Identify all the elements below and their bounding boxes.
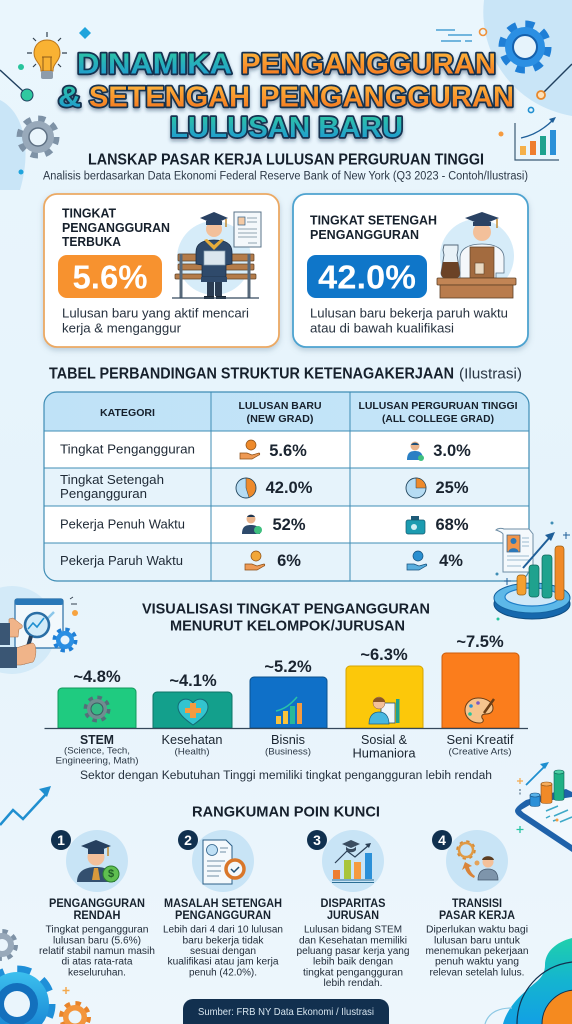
summary heading: RANGKUMAN POIN KUNCI (192, 804, 380, 820)
table header row (100, 400, 518, 425)
icon: graduate with coin (77, 840, 119, 882)
badge: 2 (178, 830, 198, 850)
bar: STEM: ~4.8% (73, 668, 121, 686)
point text: penuh (42.0%). (189, 968, 257, 978)
point text: Diperlukan waktu bagi (426, 924, 528, 936)
badge: 4: 4 (438, 832, 446, 848)
row: pekerja penuh waktu: 52% (272, 516, 306, 534)
row: tingkat setengah pengangguran: 42.0% (266, 479, 313, 497)
bar labels: Kesehatan (162, 732, 222, 747)
point text: sesuai dengan (190, 946, 256, 957)
bar: Sosial: ~6.3% (360, 646, 408, 664)
point text (39, 898, 155, 978)
bar: Kesehatan (153, 672, 232, 728)
subtitle heading: LANSKAP PASAR KERJA LULUSAN PERGURUAN TINGGI (88, 152, 484, 168)
bar labels: (Science, Tech, (64, 746, 130, 756)
row: pekerja penuh waktu: Pekerja Penuh Waktu (60, 518, 185, 532)
icon: small rising bar chart (515, 117, 559, 160)
bar: Sosial (346, 646, 423, 728)
bar labels (56, 732, 514, 766)
card heading: TINGKAT SETENGAH (310, 214, 437, 228)
row: pekerja paruh waktu (60, 551, 463, 570)
bar: Seni Kreatif (442, 633, 519, 728)
icon: bottom-left gears (0, 932, 88, 1024)
key point 2 (163, 830, 283, 978)
title: PENGANGGURAN (241, 48, 496, 80)
badge: 2: 2 (184, 832, 192, 848)
panel: open unemployment card (44, 194, 279, 347)
point text (426, 898, 528, 978)
row: tingkat setengah pengangguran (60, 473, 469, 501)
chart caption: Sektor dengan Kebutuhan Tinggi memiliki tingkat pengangguran lebih rendah (80, 770, 492, 782)
bar: STEM (58, 668, 136, 728)
point text (163, 898, 283, 978)
card description: kerja & menganggur (62, 320, 182, 336)
point text: relevan setelah lulus. (430, 968, 524, 978)
icon: light bulb (27, 32, 67, 79)
title: PENGANGGURAN (260, 82, 514, 114)
bar labels: Sosial & (361, 732, 407, 747)
badge: 4 (432, 830, 452, 850)
table header row: LULUSAN BARU (238, 400, 322, 412)
point text: TRANSISI (452, 898, 502, 910)
bar labels: (Business) (265, 746, 311, 758)
row: tingkat setengah pengangguran: Pengangguran (60, 487, 147, 501)
title: & (58, 82, 81, 114)
bar: Bisnis (250, 658, 327, 728)
row: pekerja penuh waktu: 68% (435, 516, 469, 534)
row: tingkat pengangguran: 3.0% (433, 442, 471, 460)
point text: kualifikasi atau jam kerja (168, 956, 279, 968)
table header row: (ALL COLLEGE GRAD) (382, 413, 494, 425)
stat: 42.0%: 42.0% (318, 258, 416, 296)
chart heading (142, 600, 430, 634)
card description: atau di bawah kualifikasi (310, 320, 454, 336)
card heading: PENGANGGURAN (62, 221, 170, 235)
title: SETENGAH (89, 82, 250, 114)
table heading: TABEL PERBANDINGAN STRUKTUR KETENAGAKERJAAN (49, 366, 454, 382)
bar labels: Engineering, Math) (56, 756, 138, 766)
point text: Lulusan bidang STEM (304, 924, 402, 936)
icon: grey gear (20, 119, 56, 155)
bar labels: Humaniora (352, 746, 416, 760)
bar labels: Bisnis (271, 732, 305, 747)
key point 1 (39, 830, 155, 978)
card heading: TERBUKA (62, 235, 121, 249)
badge: 3: 3 (313, 832, 321, 848)
icon: top decorative marks (0, 27, 572, 174)
bar labels: STEM (80, 732, 114, 747)
point text: Tingkat pengangguran (46, 924, 148, 936)
source footer: Sumber: FRB NY Data Ekonomi / Ilustrasi (198, 1006, 374, 1018)
title: DINAMIKA (77, 48, 232, 80)
icon: phone with bars (515, 762, 572, 852)
chart heading: MENURUT KELOMPOK/JURUSAN (170, 618, 405, 634)
key point 4 (426, 830, 528, 978)
point text: RENDAH (74, 910, 120, 922)
point text (296, 898, 410, 989)
row: tingkat pengangguran: 5.6% (269, 442, 307, 460)
row: pekerja paruh waktu: 6% (277, 552, 301, 570)
bar labels: (Health) (174, 746, 210, 758)
row: tingkat setengah pengangguran: 25% (435, 479, 469, 497)
icon: document and bar chart on platform (494, 522, 570, 620)
illustration: barista graduate (437, 212, 516, 298)
icon: graduate with coin: $ (108, 868, 114, 880)
title: LULUSAN BARU (170, 112, 403, 144)
badge: 1: 1 (57, 832, 65, 848)
icon: browser with magnifier and hands (0, 597, 78, 668)
table header row: (NEW GRAD) (246, 413, 314, 425)
icon: document with badge (203, 840, 244, 884)
stat: 42.0% (307, 255, 427, 298)
card description: Lulusan baru yang aktif mencari (62, 306, 249, 320)
row: tingkat pengangguran (60, 440, 471, 461)
panel: underemployment card (293, 194, 528, 347)
bar labels: Seni Kreatif (446, 732, 514, 747)
card heading (310, 214, 437, 242)
bar: Seni Kreatif: ~7.5% (456, 633, 504, 651)
icon: blue gear (503, 25, 547, 69)
point text: MASALAH SETENGAH (164, 898, 282, 910)
point text: menemukan pekerjaan (426, 946, 528, 957)
card heading (62, 206, 170, 249)
card description (310, 306, 508, 336)
point text: keseluruhan. (68, 968, 126, 978)
point text: Lebih dari 4 dari 10 lulusan (163, 924, 283, 936)
badge: 1 (51, 830, 71, 850)
point text: PENGANGGURAN (49, 898, 145, 910)
table header row: LULUSAN PERGURUAN TINGGI (358, 400, 518, 412)
point text: PASAR KERJA (439, 910, 515, 922)
bar: Kesehatan: ~4.1% (169, 672, 217, 690)
stat: 5.6% (58, 255, 162, 298)
comparison table (44, 392, 529, 581)
card description: Lulusan baru bekerja paruh waktu (310, 306, 508, 320)
row: tingkat setengah pengangguran: Tingkat Setengah (60, 473, 164, 487)
point text: lulusan baru untuk (434, 936, 521, 946)
stat: 5.6%: 5.6% (72, 258, 148, 296)
point text: penuh waktu yang (435, 956, 519, 968)
bar: Bisnis: ~5.2% (264, 658, 312, 676)
key point 3 (296, 830, 410, 989)
icon: rising arrow (0, 786, 51, 825)
icon: gear and worker (458, 842, 498, 880)
icon: bottom-right blobs (485, 938, 572, 1024)
subtitle source line: Analisis berdasarkan Data Ekonomi Federal Reserve Bank of New York (Q3 2023 - Contoh/Ilustrasi) (43, 170, 528, 182)
row: pekerja paruh waktu: 4% (439, 552, 463, 570)
card description (62, 306, 249, 336)
point text: JURUSAN (327, 910, 379, 922)
badge: 3 (307, 830, 327, 850)
card heading: PENGANGGURAN (310, 228, 419, 242)
point text: PENGANGGURAN (175, 910, 271, 922)
point text: di atas rata-rata (62, 956, 133, 968)
row: tingkat pengangguran: Tingkat Pengangguran (60, 442, 195, 456)
row: pekerja paruh waktu: Pekerja Paruh Waktu (60, 554, 183, 568)
point text: tingkat pengangguran (303, 968, 403, 978)
table header row: KATEGORI (100, 407, 155, 419)
point text: baru bekerja tidak (182, 936, 265, 946)
point text: lebih baik dengan (313, 956, 393, 968)
point text: peluang pasar kerja yang (296, 946, 410, 957)
title (58, 48, 514, 144)
card heading: TINGKAT (62, 206, 116, 220)
illustration: graduate on bench (172, 212, 261, 299)
bar chart: unemployment by major (44, 633, 528, 766)
icon: growth bars with cap (332, 840, 374, 882)
point text: DISPARITAS (320, 898, 386, 910)
source footer (183, 999, 389, 1024)
bar labels: (Creative Arts) (448, 746, 512, 758)
chart heading: VISUALISASI TINGKAT PENGANGGURAN (142, 600, 430, 618)
point text: dan Kesehatan memiliki (299, 936, 407, 946)
row: pekerja penuh waktu (60, 514, 469, 534)
point text: lebih rendah. (324, 978, 382, 989)
point text: relatif stabil namun masih (39, 946, 155, 957)
point text: lulusan baru (5.6%) (53, 936, 141, 946)
table heading: (Ilustrasi) (459, 366, 522, 382)
